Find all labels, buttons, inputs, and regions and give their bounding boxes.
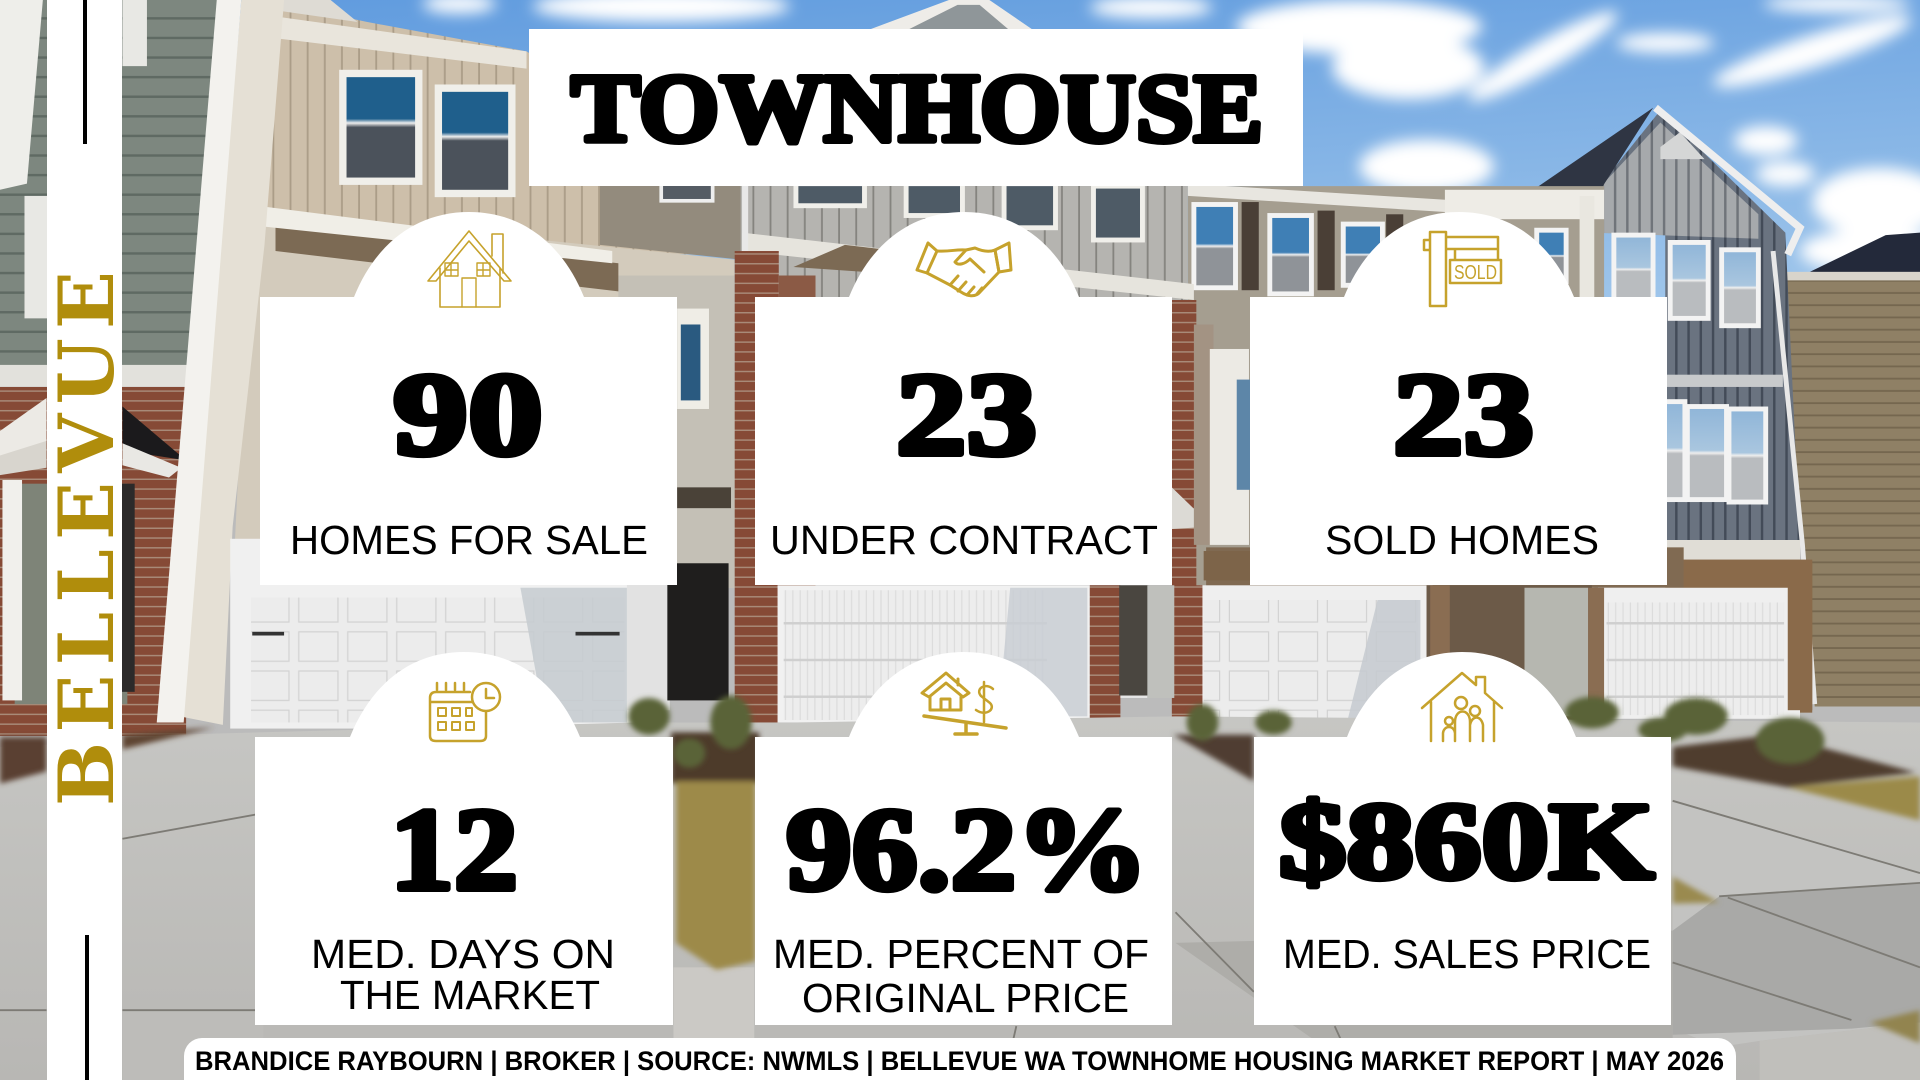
left white ribbon with city name <box>42 0 131 1080</box>
middle siding block <box>1188 186 1604 590</box>
garage doors right <box>1200 585 1433 722</box>
panel: homes for sale <box>260 212 677 585</box>
panel: under contract <box>755 212 1172 585</box>
icon: sold sign: SOLD <box>1454 262 1497 284</box>
number: 96.2%: 96.2% <box>786 784 1148 915</box>
left garage <box>230 539 647 729</box>
label: homes for sale: HOMES FOR SALE <box>290 517 648 563</box>
icon: house <box>428 231 511 307</box>
icon: house and dollar on scale <box>922 673 1006 734</box>
label: median days on the market: MED. DAYS ON <box>311 931 615 977</box>
label: median days on the market <box>311 931 615 1018</box>
sky <box>0 0 1920 404</box>
panel: median percent of original price <box>755 652 1172 1025</box>
icon: calendar with clock <box>430 683 500 741</box>
label: median percent of original price <box>773 931 1149 1021</box>
left house <box>0 0 218 367</box>
lawn and mulch <box>0 727 1920 1043</box>
panel: median days on market <box>255 652 673 1025</box>
centre gray unit <box>741 184 1188 300</box>
city name: Bellevue: BELLEVUE <box>42 271 131 806</box>
number: 23: 23 <box>1393 349 1534 480</box>
label: median percent of original price: ORIGINAL PRICE <box>802 975 1129 1021</box>
shrubs <box>628 696 1824 768</box>
blue gable unit <box>1592 110 1800 545</box>
title banner: TOWNHOUSE <box>571 55 1263 163</box>
far right building <box>1810 233 1920 274</box>
panel: median sales price <box>1254 652 1671 1025</box>
number: 12: 12 <box>390 784 518 915</box>
pavement joints <box>0 801 1920 1080</box>
clouds <box>422 0 1920 273</box>
number: 23: 23 <box>896 349 1037 480</box>
top-centre gable <box>863 0 1036 32</box>
label: under contract: UNDER CONTRACT <box>770 517 1158 563</box>
footer source bar: BRANDICE RAYBOURN | BROKER | SOURCE: NWMLS | BELLEVUE WA TOWNHOME HOUSING MARKET REPORT | MAY 2026 <box>195 1046 1724 1076</box>
number: $860K: $860K <box>1279 780 1654 902</box>
icon: sold sign <box>1424 232 1501 306</box>
title banner <box>529 29 1303 186</box>
panel: sold homes <box>1250 212 1667 585</box>
number: 90: 90 <box>393 349 543 480</box>
label: sold homes: SOLD HOMES <box>1325 517 1599 563</box>
white trim tower <box>180 0 284 725</box>
left beige unit upper <box>263 0 741 257</box>
ground concrete <box>0 716 1920 1080</box>
icon: handshake <box>917 243 1011 296</box>
label: median percent of original price: MED. PERCENT OF <box>773 931 1149 977</box>
label: median days on the market: THE MARKET <box>340 972 600 1018</box>
footer source bar <box>184 1038 1736 1080</box>
centre garage <box>778 585 1090 722</box>
label: median sales price: MED. SALES PRICE <box>1283 931 1651 977</box>
icon: family in house <box>1422 673 1502 741</box>
